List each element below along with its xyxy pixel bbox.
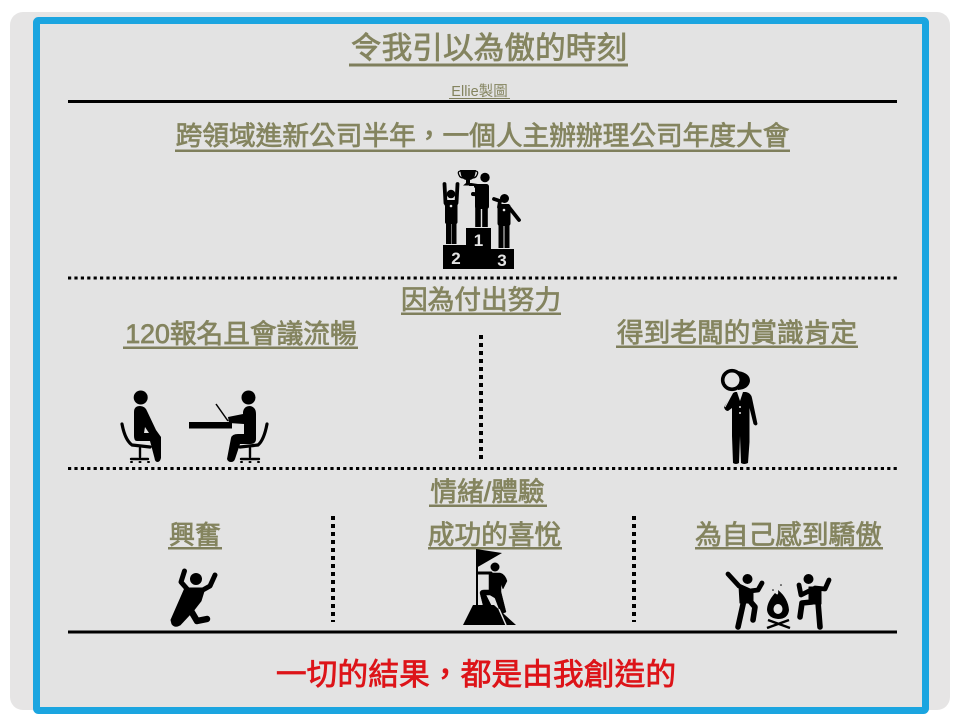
emotion: pride: 為自己感到驕傲: [695, 520, 882, 550]
seated person left: [122, 390, 161, 462]
icon: person with magnifier: [723, 371, 758, 464]
icon: podium with three winners: 2: [451, 249, 461, 268]
section heading: emotions: 情緒/體驗: [430, 477, 545, 507]
icon: dancing around campfire: [728, 574, 829, 628]
seated person right: [227, 390, 267, 462]
figure 2: [444, 184, 458, 244]
campfire: [767, 584, 790, 628]
left point: 120報名且會議流暢: [125, 319, 357, 349]
emotion: joy of success: 成功的喜悅: [428, 520, 561, 550]
title: 令我引以為傲的時刻: [351, 30, 627, 66]
icon: person planting flag on summit: [463, 549, 516, 625]
dancer left: [728, 574, 762, 627]
right point: 得到老闆的賞識肯定: [617, 318, 857, 348]
headline: 跨領域進新公司半年，一個人主辦辦理公司年度大會: [176, 121, 789, 151]
dancer right: [799, 574, 829, 627]
emotion: excitement: 興奮: [169, 520, 221, 550]
credit: Ellie製圖: [451, 83, 508, 100]
icon: seated meeting: [122, 390, 267, 462]
conclusion: 一切的結果，都是由我創造的: [276, 657, 676, 692]
figure 3: [494, 194, 519, 248]
icon: podium with three winners: [443, 170, 519, 270]
figure 1 with trophy: [458, 170, 490, 227]
icon: podium with three winners: 1: [474, 231, 483, 250]
icon: excited person: [171, 571, 215, 626]
table and laptop: [189, 404, 232, 428]
section heading: effort: 因為付出努力: [401, 285, 561, 315]
icon: podium with three winners: 3: [497, 251, 507, 270]
